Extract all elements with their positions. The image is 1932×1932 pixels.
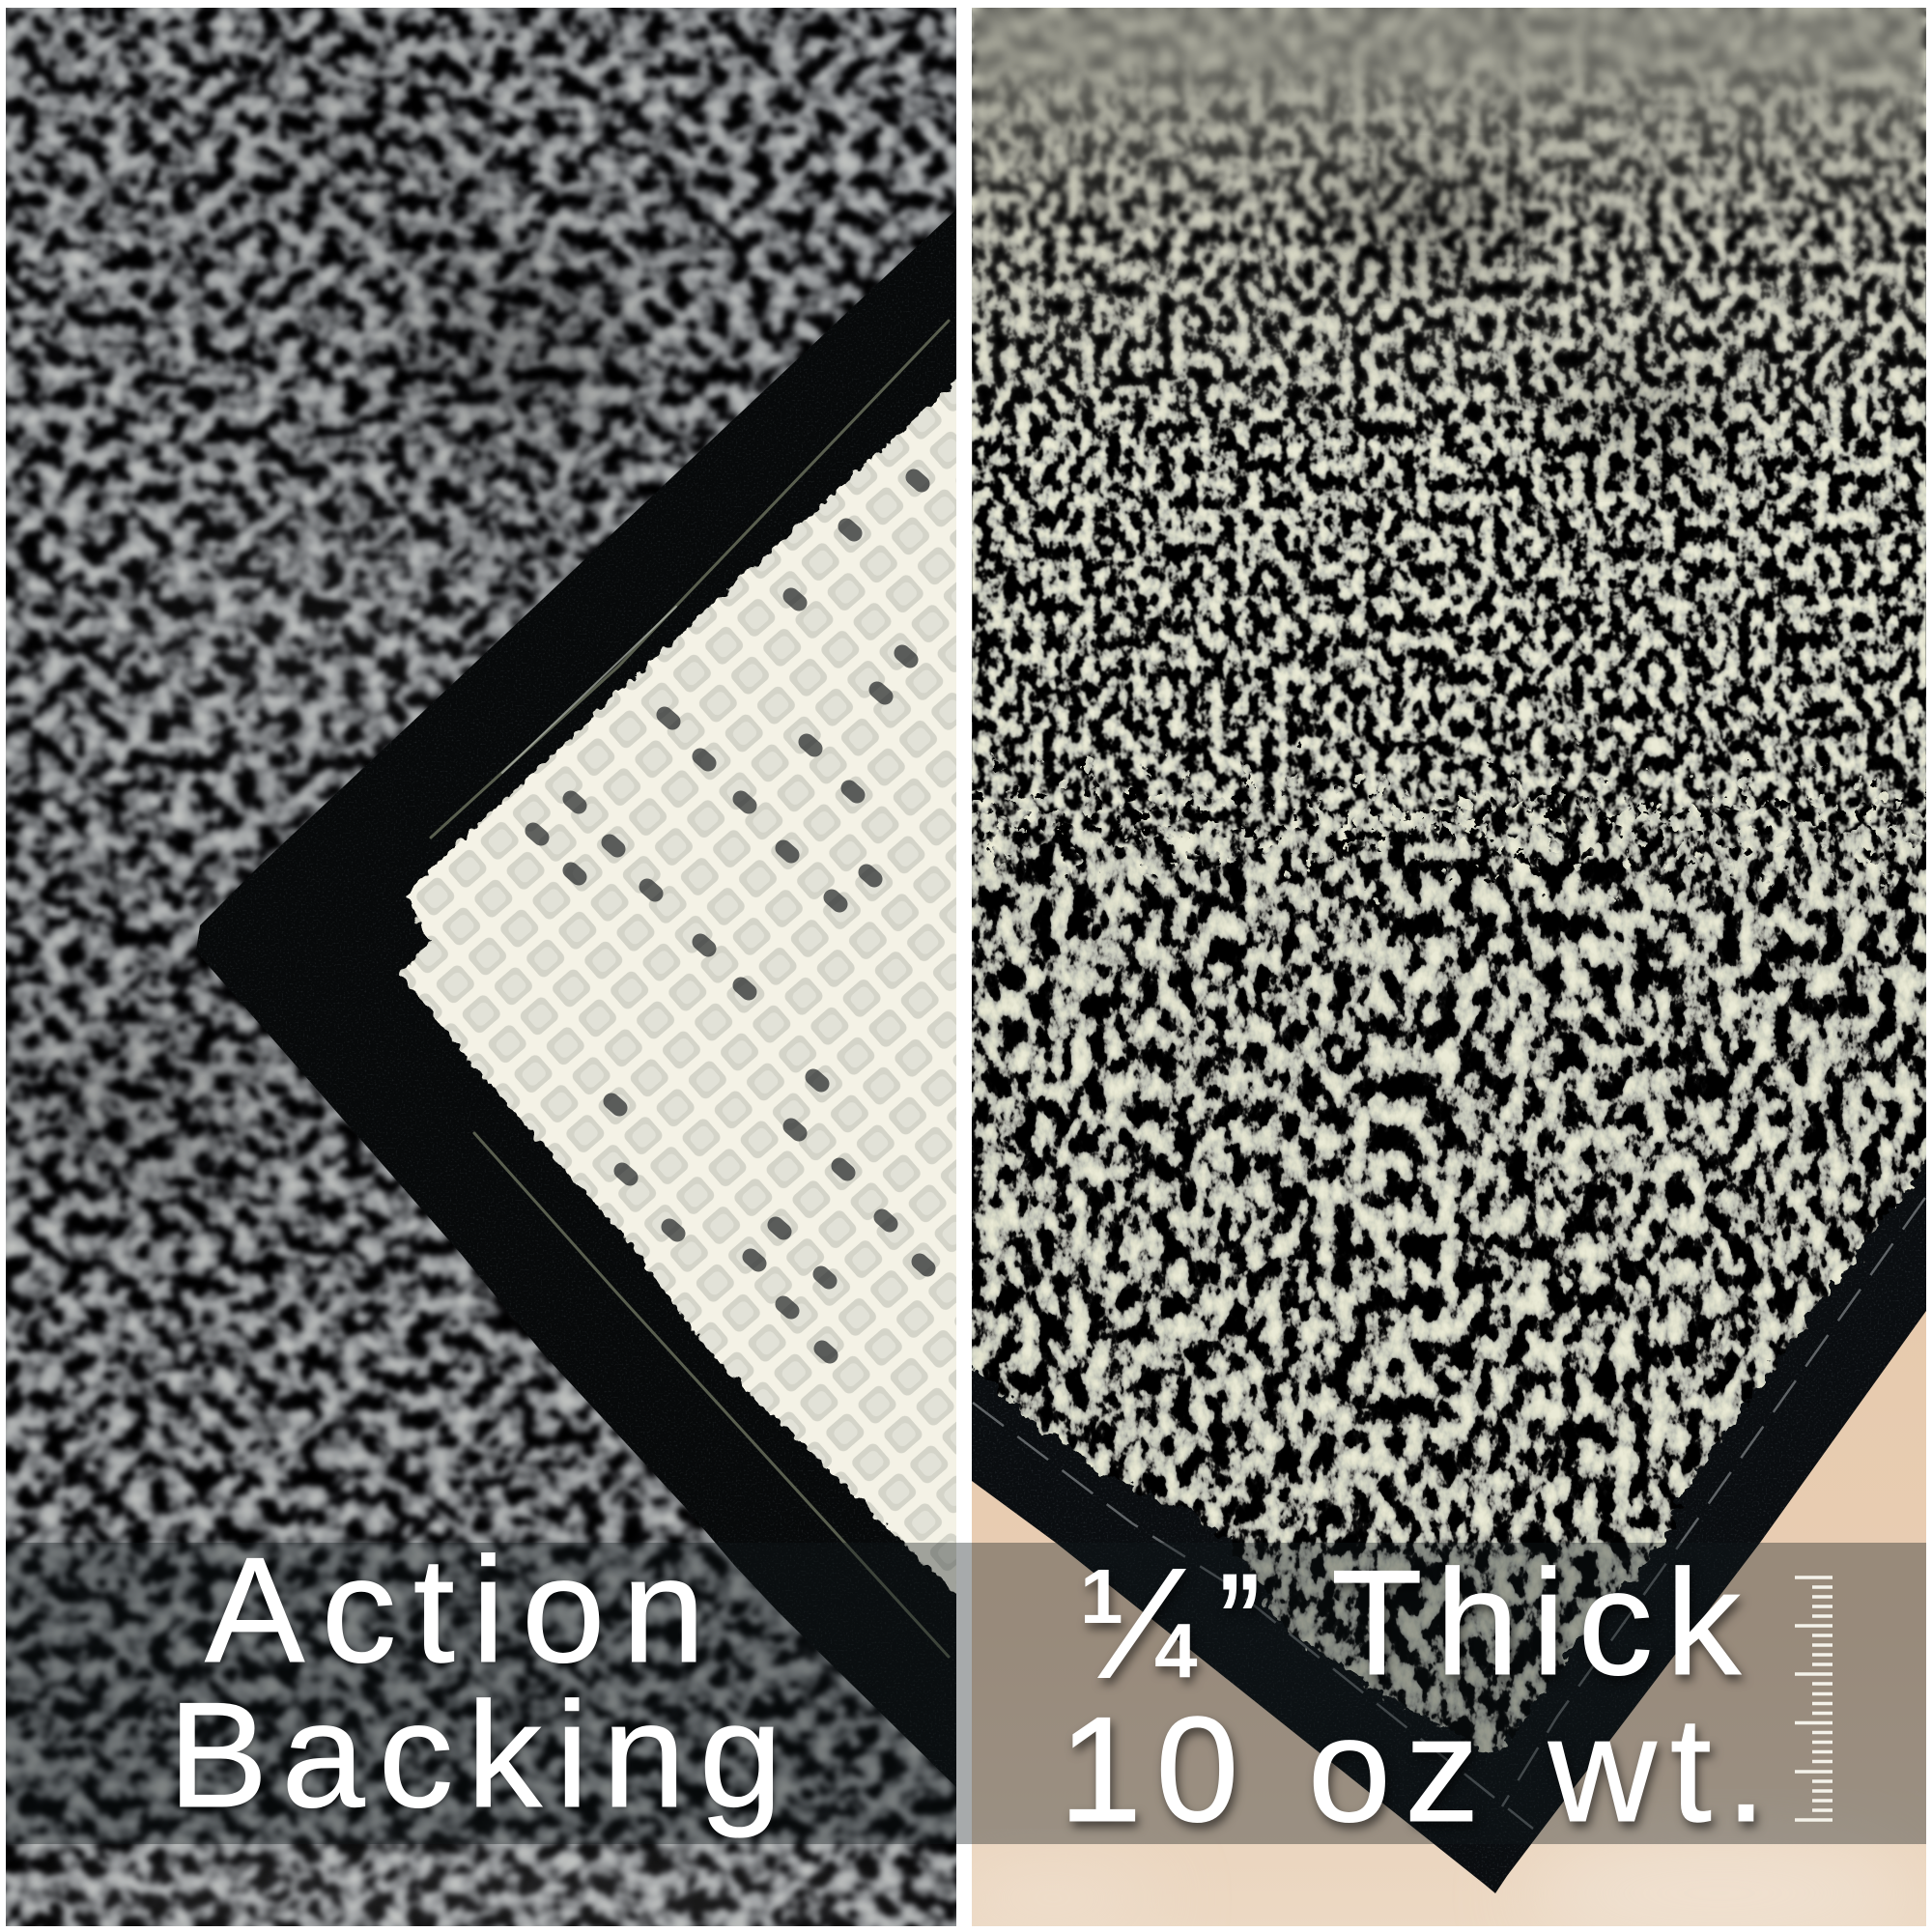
rug pile speckle, left [0, 0, 966, 1932]
icon: vertical ruler [1795, 1577, 1833, 1820]
dark pile showing through mesh holes [533, 477, 927, 1355]
caption: Action Backing [168, 1526, 782, 1838]
panel: pile thickness photo [947, 0, 1926, 1932]
stitch line, lower binding [474, 1133, 949, 1657]
caption line: Action: Action [205, 1526, 705, 1693]
caption line: 10 oz wt.: 10 oz wt. [1059, 1686, 1767, 1853]
caption line: Backing: Backing [168, 1671, 782, 1838]
caption line: Thick: Thick [1331, 1539, 1741, 1706]
white mesh backing [399, 379, 956, 1594]
caption: quarter inch thick, 10 oz wt. [1059, 1539, 1767, 1853]
fraction one quarter [1080, 1553, 1198, 1693]
far-distance blurred pile [972, 0, 1926, 232]
rug pile fronds, right [972, 0, 1926, 1797]
fraction one quarter: 1 [1080, 1553, 1122, 1639]
black binding, right [972, 1159, 1926, 1893]
peach table surface [972, 1311, 1926, 1926]
inch mark: ” [1216, 1548, 1264, 1684]
fraction one quarter: 4 [1154, 1607, 1198, 1693]
stitching, right binding [973, 1198, 1925, 1829]
near pile, finer fronds [972, 0, 1926, 1159]
translucent caption band [6, 1543, 1926, 1844]
mid-distance soft focus pile [972, 0, 1926, 444]
black binding corner, left [196, 210, 976, 1787]
panel: action backing photo [0, 0, 995, 1932]
stitch line, upper binding [431, 321, 949, 838]
